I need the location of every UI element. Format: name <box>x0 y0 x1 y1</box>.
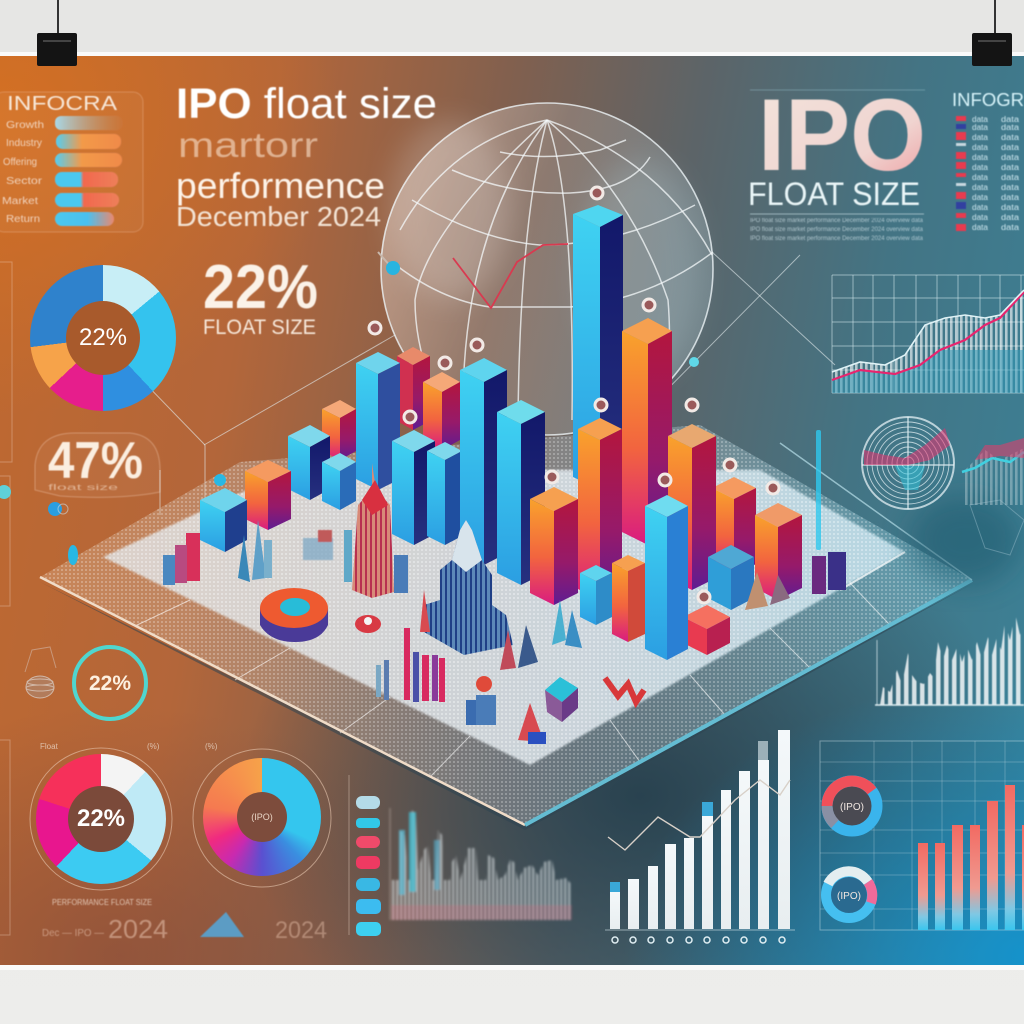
donut: upper left: 22% <box>79 324 127 351</box>
title: IPO float size <box>176 80 437 128</box>
icon: red scribble <box>605 678 644 702</box>
red disc <box>260 588 328 642</box>
bar <box>708 545 754 610</box>
panel: right infographic table: data <box>1001 213 1020 222</box>
stat: 47% badge: float size <box>48 483 119 492</box>
donut labels: (IPO) <box>837 891 861 902</box>
tower: lower red <box>518 703 546 744</box>
stat: 22% float size: 22% <box>203 253 318 322</box>
panel: left infographic list: Market <box>2 196 38 207</box>
donut: upper left <box>30 265 176 411</box>
panel: left infographic list: Return <box>6 214 40 225</box>
bar chart: lower center skyline <box>390 808 572 920</box>
pill legend <box>349 775 381 936</box>
teal vertical glow <box>816 430 821 550</box>
panel: right infographic table: data <box>972 153 989 162</box>
heading: right IPO <box>748 78 926 242</box>
panel: right infographic table: data <box>972 213 989 222</box>
panel: left infographic list: Sector <box>6 176 43 187</box>
rings around lower donuts <box>30 748 331 890</box>
dark shadow area <box>910 495 1020 585</box>
line chart: upper right <box>832 275 1024 393</box>
panel: right infographic table: data <box>972 223 989 232</box>
tower: red bars <box>376 628 445 702</box>
tower: low city block <box>303 530 333 560</box>
bar <box>356 352 400 490</box>
bar <box>423 372 460 450</box>
panel: lower right frame <box>820 741 1024 930</box>
panel: right infographic table: data <box>1001 133 1020 142</box>
bar <box>288 425 330 500</box>
bar <box>668 424 716 590</box>
title: martorr <box>178 126 318 165</box>
panel: left infographic list <box>0 92 143 232</box>
bar <box>712 477 756 575</box>
panel: right infographic table: data <box>972 123 989 132</box>
bars: 3D columns <box>200 205 802 660</box>
donut: lower left <box>36 754 166 884</box>
caption: bottom dates: PERFORMANCE FLOAT SIZE <box>52 898 152 907</box>
bar <box>580 565 612 625</box>
bar <box>645 495 688 660</box>
tower: center blue spires <box>500 600 582 670</box>
caption: bottom dates: Dec — IPO — <box>42 928 104 939</box>
bar <box>245 460 291 530</box>
bar <box>755 503 802 600</box>
stat: 22% float size: FLOAT SIZE <box>203 316 316 339</box>
tower: spire group <box>238 520 272 582</box>
panel: left infographic list: Growth <box>6 120 44 131</box>
panel: right infographic table: data <box>972 115 989 124</box>
heading: right IPO: IPO <box>758 78 926 192</box>
clip right <box>972 0 1012 66</box>
teal cube <box>545 677 578 722</box>
bar <box>322 453 356 510</box>
radial chart <box>862 417 954 509</box>
panel: right infographic table: data <box>972 203 989 212</box>
tower: left cluster <box>163 533 200 585</box>
panel: right infographic table: data <box>1001 153 1020 162</box>
heading: right IPO: FLOAT SIZE <box>748 176 920 212</box>
caption: bottom dates: 2024 <box>108 914 168 944</box>
bar <box>622 318 672 545</box>
panel: left infographic list: Industry <box>6 138 42 149</box>
icon: connector dot <box>689 357 699 367</box>
small towers: city blocks <box>163 463 846 744</box>
donut labels: (IPO) <box>840 802 864 813</box>
panel: right infographic table: data <box>1001 193 1020 202</box>
bar <box>200 488 247 552</box>
panel: right infographic table: data <box>1001 223 1020 232</box>
area chart: right side waves <box>962 438 1024 555</box>
ring: 22%: 22% <box>89 672 131 695</box>
icon: small sphere <box>25 647 56 698</box>
panel: right infographic table: data <box>1001 183 1020 192</box>
panel: right infographic table: data <box>972 183 989 192</box>
donut labels <box>837 802 864 902</box>
donut: lower center <box>203 758 321 876</box>
connector lines <box>140 252 835 515</box>
bar <box>427 442 462 545</box>
bar <box>397 347 430 430</box>
panel: right infographic table: data <box>1001 143 1020 152</box>
globe <box>378 103 713 435</box>
panel: right infographic table: data <box>1001 163 1020 172</box>
stat: 47% badge: 47% <box>48 432 143 490</box>
area chart: spiky white <box>875 613 1024 705</box>
panel: right infographic table: data <box>1001 123 1020 132</box>
left edge fragments <box>0 262 12 935</box>
bar <box>460 358 507 565</box>
panel: right infographic table: data <box>972 173 989 182</box>
title: December 2024 <box>176 201 381 232</box>
icon: teal marker <box>0 485 11 499</box>
bar <box>392 430 435 545</box>
panel: right infographic table: data <box>972 193 989 202</box>
ring: 22% <box>74 647 146 719</box>
icon: red pin on platform <box>355 615 381 633</box>
panel: right infographic table: data <box>972 163 989 172</box>
bar <box>612 555 645 642</box>
tower: main skyscraper <box>420 520 513 655</box>
panel: left infographic list: INFOCRA <box>7 93 118 115</box>
panel: perspective platform <box>40 425 972 830</box>
bar chart: white bars <box>605 730 795 943</box>
panel: right infographic table: data <box>972 133 989 142</box>
icon: cyan pin on bar <box>68 474 226 565</box>
lower donut small labels: (%) <box>205 742 218 751</box>
heading: right IPO: IPO float size market performance December 2024 overview data <box>750 227 924 233</box>
title: performence <box>176 165 385 206</box>
pins on bars <box>369 187 779 603</box>
lower donut small labels: Float <box>40 742 59 751</box>
lower donut small labels: (%) <box>147 742 160 751</box>
donut: lower center: (IPO) <box>251 812 273 822</box>
heading: right IPO: IPO float size market performance December 2024 overview data <box>750 218 924 224</box>
bar <box>683 605 730 655</box>
clip left <box>37 0 77 66</box>
lower donut small labels <box>40 742 218 751</box>
bar <box>322 400 356 460</box>
panel: right infographic table: data <box>1001 173 1020 182</box>
donut: lower right top <box>827 781 877 831</box>
panel: right infographic table: data <box>1001 203 1020 212</box>
title <box>176 80 437 232</box>
bar <box>530 487 578 605</box>
panel: right infographic table: data <box>1001 115 1020 124</box>
caption: bottom dates: 2024 <box>275 917 327 944</box>
tower: lower small <box>466 676 496 725</box>
panel: right infographic table: INFOGR <box>952 90 1024 110</box>
panel: right infographic table: data <box>972 143 989 152</box>
donut: lower right bottom <box>826 871 872 918</box>
tower: red skyscraper <box>344 463 408 598</box>
caption: bottom dates <box>42 898 327 944</box>
heading: right IPO: IPO float size market performance December 2024 overview data <box>750 236 924 242</box>
panel: right infographic table <box>952 90 1024 232</box>
bar: tallest <box>573 205 623 490</box>
tower: right cluster <box>745 552 846 610</box>
panel: left infographic list: Offering <box>3 157 37 168</box>
bar <box>497 400 545 585</box>
bar <box>578 418 622 600</box>
donut: lower left: 22% <box>77 805 125 832</box>
icon: small blue pin <box>48 502 68 516</box>
